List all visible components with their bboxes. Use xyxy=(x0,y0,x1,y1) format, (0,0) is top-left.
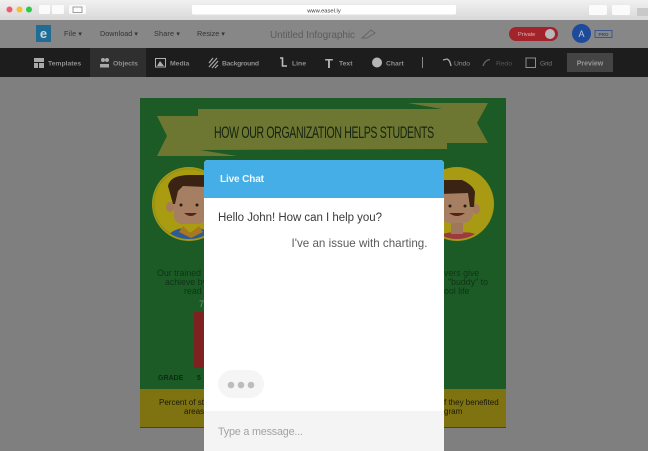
chat header xyxy=(204,160,444,198)
toolbar labels: Line xyxy=(292,60,306,68)
editor toolbar xyxy=(0,48,648,77)
logo: e xyxy=(40,26,47,41)
menu items: Download ▾ xyxy=(100,29,138,38)
agent message: Hello John! How can I help you? xyxy=(218,212,382,224)
left description text: read xyxy=(184,286,202,296)
left description text xyxy=(157,268,208,296)
title banner: HOW OUR ORGANIZATION HELPS STUDENTS xyxy=(214,122,434,142)
left description text: Our trained xyxy=(157,268,201,278)
red bar xyxy=(194,312,206,368)
yellow footer band: Percent of st xyxy=(159,398,205,407)
private toggle: Private xyxy=(518,32,535,38)
live chat window xyxy=(204,160,444,451)
icon: text: T xyxy=(325,56,333,71)
axis labels: 5 xyxy=(197,375,201,382)
icon: media xyxy=(156,58,166,67)
toolbar labels: Grid xyxy=(540,60,552,68)
message input: Type a message... xyxy=(218,426,303,438)
toolbar labels: Media xyxy=(170,60,189,68)
divider xyxy=(422,57,423,68)
right description text: "buddy" to xyxy=(448,277,488,287)
icon: redo xyxy=(483,60,490,66)
icon: templates xyxy=(34,58,44,68)
infographic panel xyxy=(140,98,506,428)
toolbar labels: Objects xyxy=(113,60,138,68)
toolbar labels xyxy=(48,60,552,68)
menu items: Resize ▾ xyxy=(197,29,225,38)
preview button: Preview xyxy=(577,60,604,68)
pro badge xyxy=(595,30,612,38)
bar value: 7 xyxy=(199,299,204,309)
typing indicator xyxy=(218,370,264,398)
message input xyxy=(204,411,444,451)
icon: background xyxy=(209,58,218,68)
right description text: ool life xyxy=(444,286,470,296)
icon: chart xyxy=(372,58,382,68)
portrait: boy left xyxy=(152,167,204,241)
private toggle xyxy=(509,27,558,41)
toolbar labels: Background xyxy=(222,60,259,68)
right description text xyxy=(444,268,488,296)
toolbar labels: Text xyxy=(339,60,353,68)
logo xyxy=(36,25,51,42)
yellow footer band: f they benefited xyxy=(444,398,499,407)
top menu bar xyxy=(0,20,648,48)
document title: Untitled Infographic xyxy=(270,30,355,41)
avatar: A xyxy=(578,29,585,39)
browser title bar xyxy=(0,0,648,20)
right description text: vers give xyxy=(444,268,479,278)
toolbar labels: Undo xyxy=(454,60,470,68)
user message: I've an issue with charting. xyxy=(292,237,428,250)
axis labels: GRADE xyxy=(158,375,184,382)
left description text: achieve by xyxy=(165,277,208,287)
yellow footer band: areas xyxy=(184,407,204,416)
title banner xyxy=(157,103,488,156)
menu items xyxy=(64,29,225,38)
toolbar labels: Templates xyxy=(48,60,81,68)
axis labels xyxy=(158,375,201,382)
icon: grid checkbox xyxy=(526,58,536,68)
pro badge: PRO xyxy=(599,32,609,37)
avatar xyxy=(572,24,591,43)
portrait: boy right xyxy=(444,167,494,241)
menu items: File ▾ xyxy=(64,29,82,38)
preview button xyxy=(567,53,613,72)
yellow footer band: gram xyxy=(444,407,463,416)
icon: pencil xyxy=(362,30,375,38)
yellow footer band xyxy=(140,389,506,428)
icon: objects xyxy=(100,58,109,68)
icon: line xyxy=(280,58,287,66)
toolbar labels: Redo xyxy=(496,60,512,68)
menu items: Share ▾ xyxy=(154,29,180,38)
browser title bar: www.easel.ly xyxy=(306,8,341,14)
toolbar labels: Chart xyxy=(386,60,404,68)
icon: undo xyxy=(443,59,451,66)
chat header: Live Chat xyxy=(220,174,265,185)
